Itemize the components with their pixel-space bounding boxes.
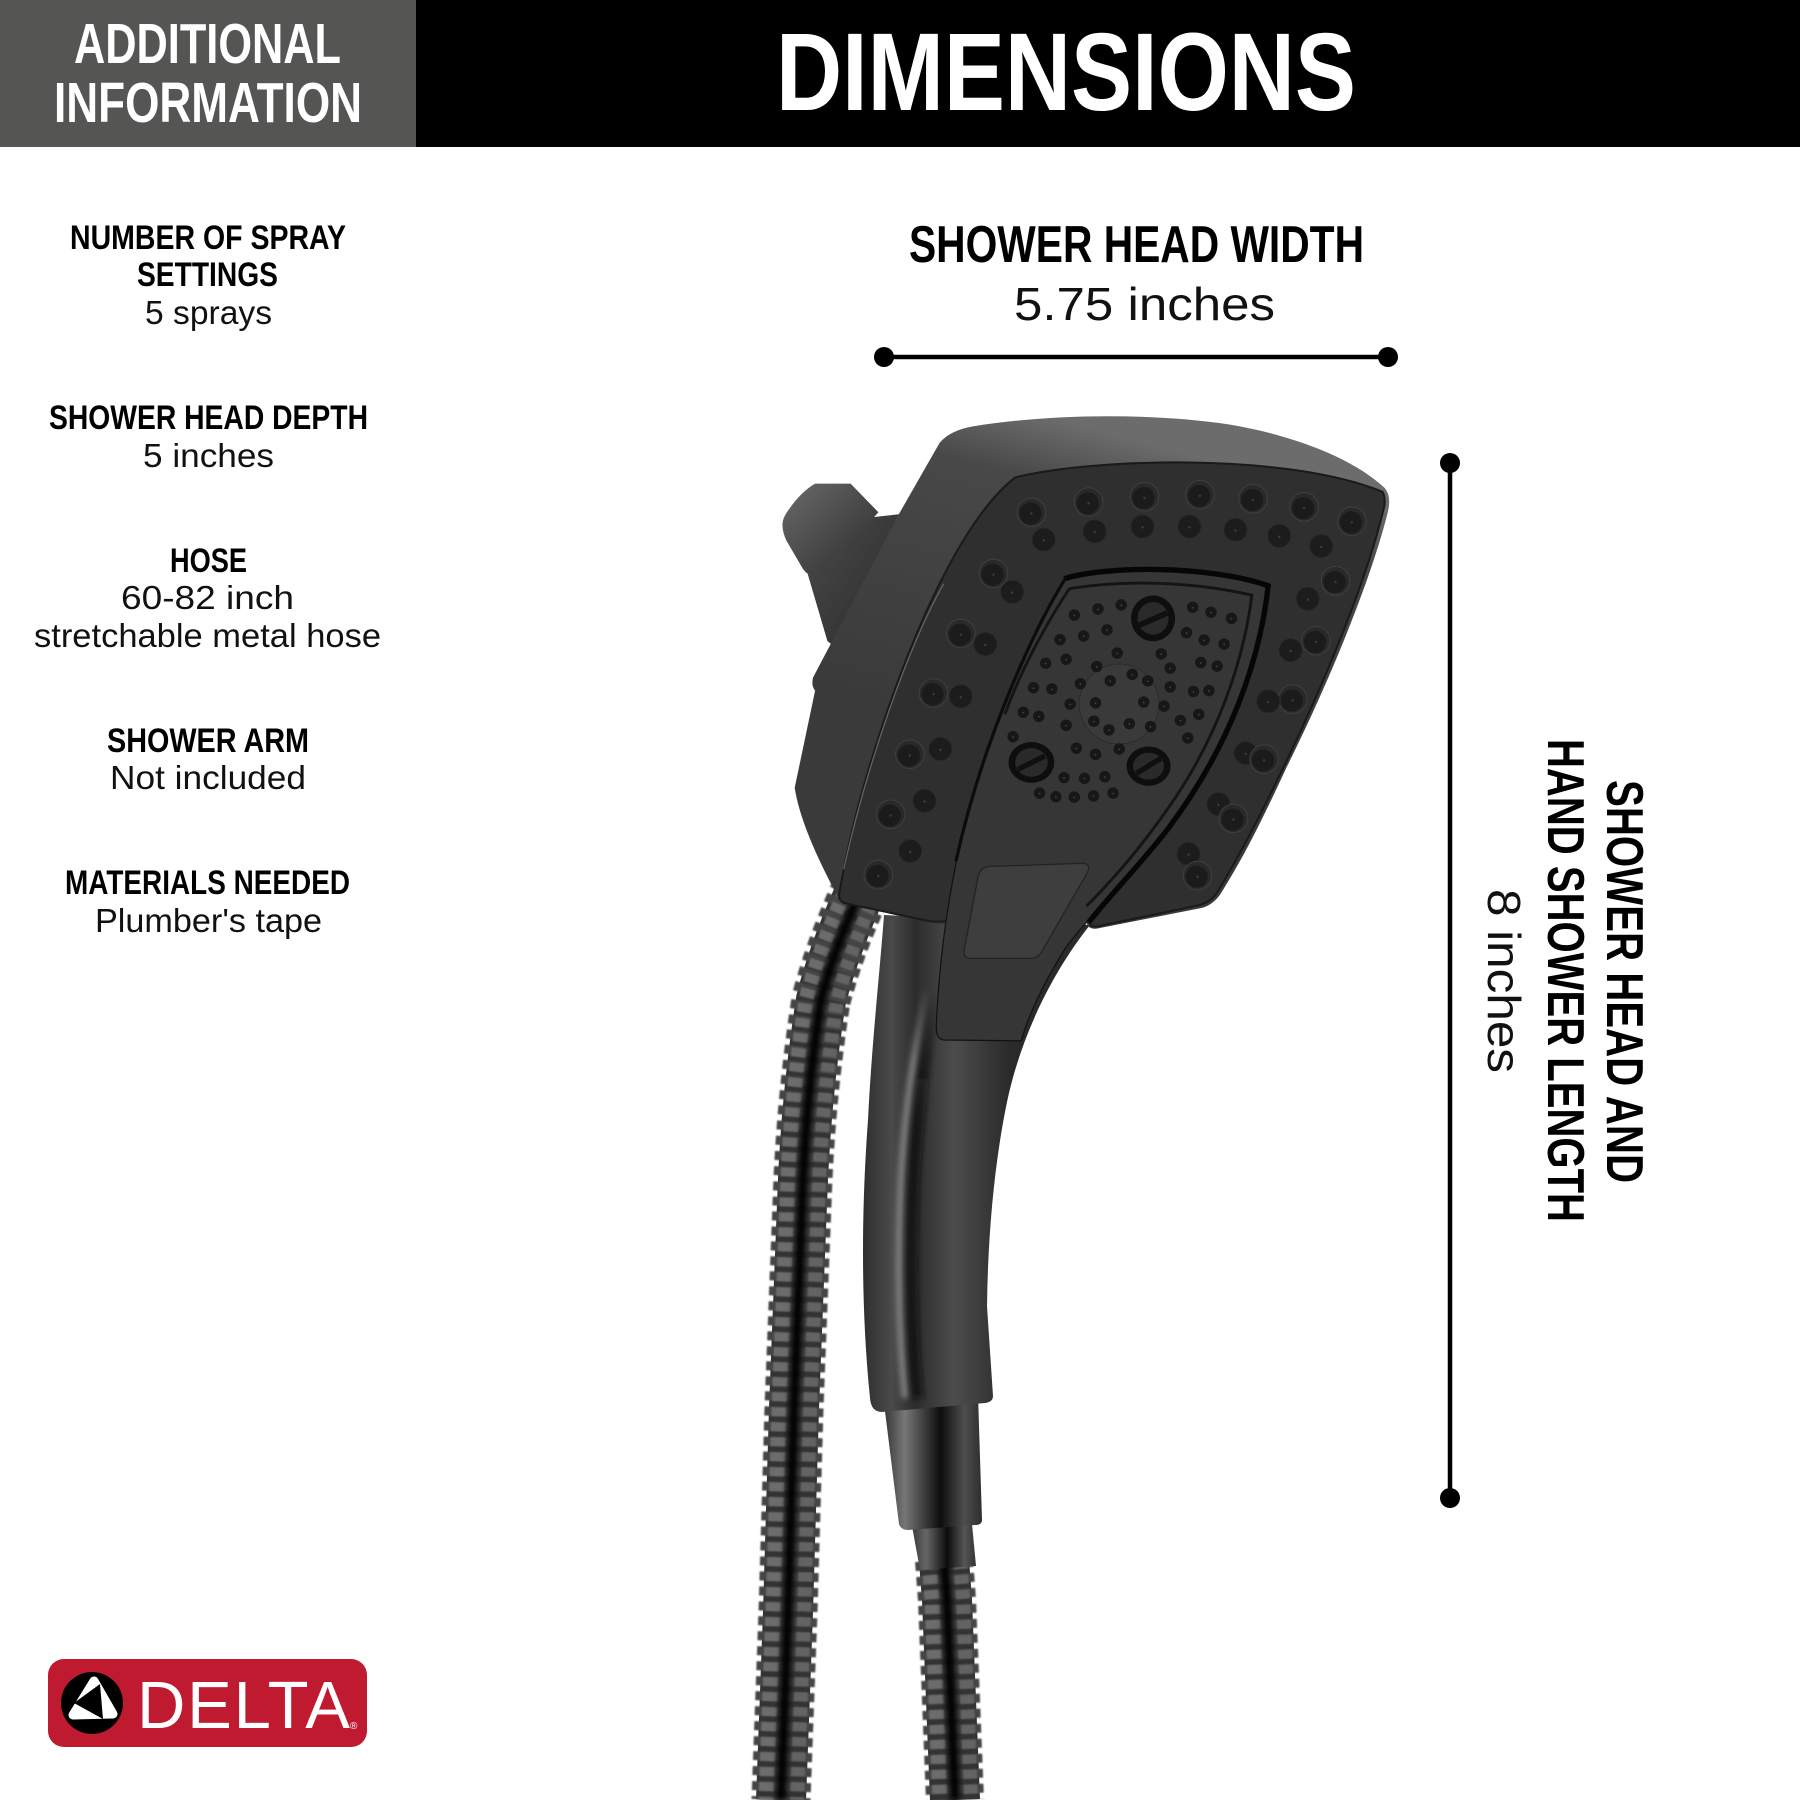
info: number of spray settings: SETTINGS: [137, 256, 278, 294]
logo: Delta: [48, 1659, 367, 1747]
hose collar: [883, 1395, 982, 1530]
large massage nozzles: [1009, 596, 1175, 786]
center ring: [1079, 664, 1159, 744]
heading: shower head width: 5.75 inches: [1014, 278, 1275, 330]
face edge highlight: [844, 584, 944, 869]
heading: shower head width: [909, 216, 1364, 330]
head body: [795, 416, 1389, 929]
info: hose: HOSE: [170, 542, 247, 580]
info: shower arm: Not included: [110, 759, 306, 796]
info: shower head depth: [49, 399, 368, 474]
width dimension line: [874, 347, 1398, 367]
handset front panel: [936, 568, 1268, 1041]
button pad: [964, 863, 1089, 958]
heading: shower head width: SHOWER HEAD WIDTH: [909, 216, 1364, 274]
heading: shower head and hand shower length (rotated): HAND SHOWER LENGTH: [1536, 739, 1594, 1222]
info: shower arm: [107, 722, 309, 796]
outer nozzles: [864, 480, 1366, 890]
info: number of spray settings: [70, 219, 346, 331]
heading: shower head and hand shower length (rotated): [1478, 739, 1653, 1222]
info: shower head depth: 5 inches: [143, 437, 274, 474]
info: hose: [34, 542, 381, 654]
info: shower head depth: SHOWER HEAD DEPTH: [49, 399, 368, 437]
info: hose: 60-82 inch: [121, 579, 294, 616]
header: dimensions title: DIMENSIONS: [776, 11, 1356, 134]
hand shower handle: [863, 915, 1090, 1412]
logo: Delta: DELTA: [137, 1668, 350, 1743]
info: number of spray settings: 5 sprays: [145, 294, 272, 331]
outer spray face: [839, 462, 1385, 927]
panel groove: [1064, 569, 1268, 922]
outer metal hose: [766, 850, 896, 1800]
info: materials needed: MATERIALS NEEDED: [65, 864, 350, 902]
heading: shower head and hand shower length (rotated): SHOWER HEAD AND: [1595, 780, 1653, 1183]
logo: Delta: ®: [350, 1721, 358, 1732]
header: additional information: [0, 0, 416, 147]
info: materials needed: [65, 864, 350, 939]
info: materials needed: Plumber's tape: [95, 902, 322, 939]
lower metal hose: [912, 1524, 976, 1800]
connector neck: [807, 514, 899, 653]
header: additional information: INFORMATION: [54, 71, 362, 135]
connector cylinder: [782, 484, 878, 576]
info: hose: stretchable metal hose: [34, 617, 381, 654]
shower head: [782, 416, 1389, 1041]
panel left groove: [956, 578, 1066, 861]
info: number of spray settings: NUMBER OF SPRAY: [70, 219, 346, 257]
product: shower head with hose: [766, 416, 1389, 1800]
header: dimensions title: [416, 0, 1800, 147]
length dimension line: [1440, 453, 1460, 1508]
info: shower arm: SHOWER ARM: [107, 722, 309, 760]
inner spray face: [1005, 583, 1252, 906]
heading: shower head and hand shower length (rotated): 8 inches: [1478, 889, 1530, 1073]
header: additional information: ADDITIONAL: [74, 12, 341, 76]
center nozzles: [1007, 599, 1237, 803]
